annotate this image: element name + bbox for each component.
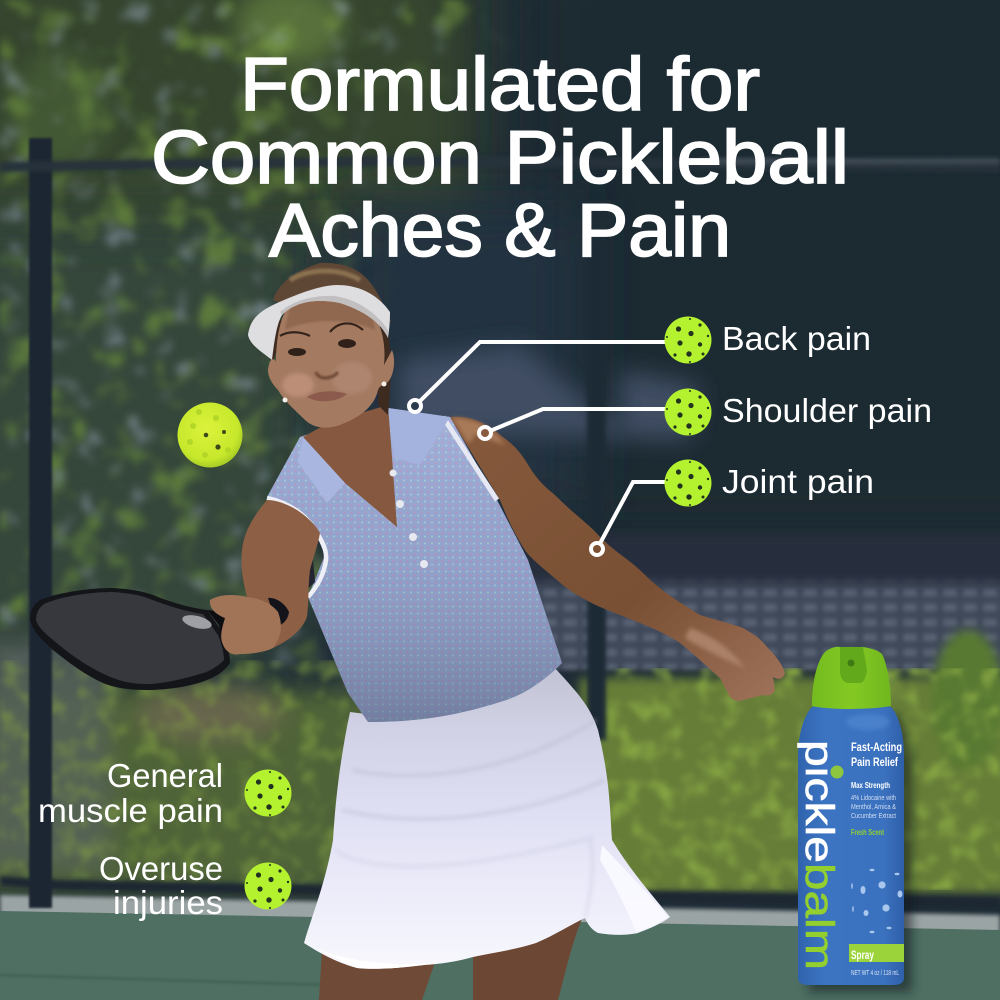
product: pickle balm spray can: [797, 647, 912, 992]
callout: joint pain: Joint pain: [722, 463, 874, 500]
callout: general muscle pain: General: [107, 757, 223, 794]
can logo: [797, 740, 841, 970]
ball graphic on can: [851, 869, 902, 933]
callout: joint pain: [591, 460, 874, 555]
callout: general muscle pain: [38, 757, 292, 829]
front arm: [241, 500, 320, 648]
fence rails and posts: [0, 876, 1000, 908]
face features: [280, 323, 363, 336]
callout: overuse injuries: injuries: [113, 884, 223, 921]
can logo: pickle: [797, 740, 841, 863]
can label text: [851, 740, 902, 837]
skirt folds: [335, 720, 605, 918]
product: pickle balm spray can: Spray: [851, 948, 874, 962]
hand: [210, 595, 281, 654]
back arm: [450, 417, 785, 701]
paddle: [30, 588, 230, 690]
can label text: Pain Relief: [851, 755, 899, 769]
lower foliage left: [0, 690, 380, 890]
can label text: Fresh Scent: [851, 828, 884, 837]
can label text: Fast-Acting: [851, 740, 902, 754]
callout: back pain: Back pain: [722, 320, 871, 357]
head: [268, 300, 394, 428]
spray band: [849, 944, 904, 962]
visor: [248, 285, 390, 360]
light strip & court: [0, 895, 1000, 935]
callout: general muscle pain: muscle pain: [38, 792, 223, 829]
shirt: [267, 408, 562, 722]
can label text: 4% Lidocaine with: [851, 795, 896, 802]
title: [151, 42, 849, 272]
hedge right: [580, 678, 1000, 893]
leaf mottling: [0, 0, 472, 689]
can logo: balm: [797, 863, 841, 970]
can label text: Cucumber Extract: [851, 813, 896, 820]
title: Formulated for: [240, 42, 760, 126]
player photo: [30, 263, 785, 1000]
callout: overuse injuries: [99, 850, 292, 921]
hair: [273, 263, 391, 322]
title: Common Pickleball: [151, 115, 849, 199]
can label text: Menthol, Arnica &: [851, 804, 896, 811]
callout: shoulder pain: Shoulder pain: [722, 392, 932, 429]
legs: [319, 950, 435, 1000]
callout: overuse injuries: Overuse: [99, 850, 223, 887]
callout: shoulder pain: [479, 388, 932, 439]
title: Aches & Pain: [269, 188, 731, 272]
can cap: [812, 647, 891, 709]
can label text: Max Strength: [851, 781, 890, 790]
product: pickle balm spray can: NET WT 4 oz / 118 mL: [851, 970, 899, 977]
skirt: [304, 666, 670, 969]
neck: [303, 405, 397, 527]
callout: back pain: [409, 316, 871, 412]
flying pickleball: [178, 402, 242, 468]
mesh fence band: [500, 575, 1000, 670]
